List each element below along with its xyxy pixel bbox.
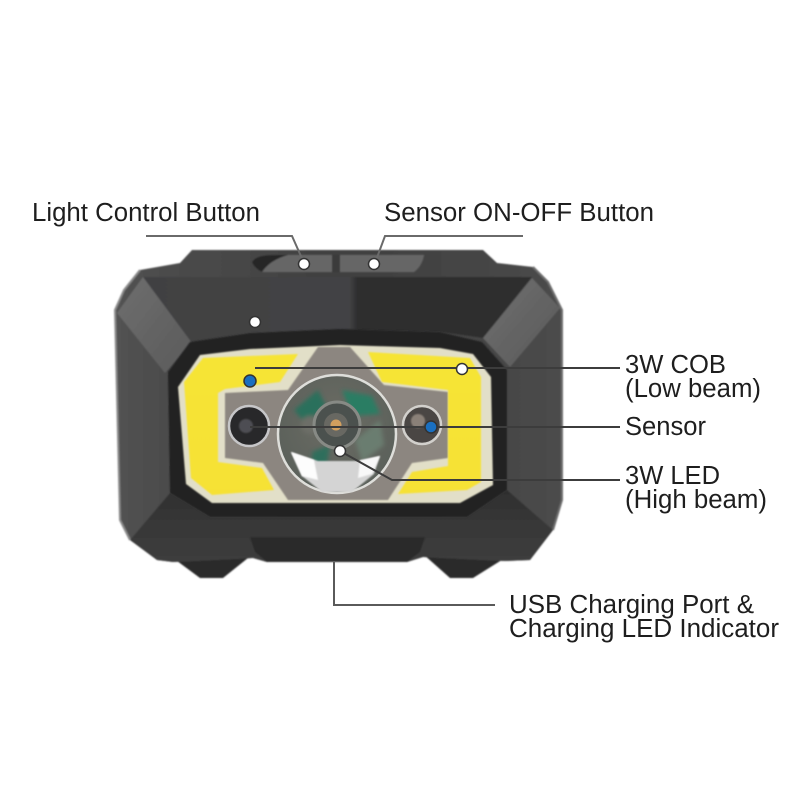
label: 3W LED: (High beam) xyxy=(625,486,767,514)
label: USB charging port: Charging LED Indicator xyxy=(509,615,780,643)
label: USB charging port: USB Charging Port & xyxy=(509,591,754,619)
top strip of buttons xyxy=(252,255,424,272)
label: 3W LED: 3W LED xyxy=(625,462,720,490)
headlamp body xyxy=(115,250,562,578)
left sensor xyxy=(229,406,269,446)
right COB strip xyxy=(368,352,481,494)
right sensor xyxy=(403,406,441,444)
leader lines xyxy=(146,236,620,605)
left facet xyxy=(117,277,192,373)
main LED lens xyxy=(278,375,396,493)
top face xyxy=(143,277,532,373)
right facet xyxy=(483,278,560,367)
LED reflector rings xyxy=(314,402,360,448)
label: 3W LED xyxy=(625,462,767,514)
LED chip xyxy=(330,420,342,430)
lower reflector highlight xyxy=(291,452,380,492)
green circuit board xyxy=(294,390,384,470)
charging port cover xyxy=(250,537,425,562)
label: 3W COB xyxy=(625,351,761,403)
label: sensor on-off button: Sensor ON-OFF Button xyxy=(384,199,654,227)
marker dots xyxy=(244,258,468,456)
left COB strip xyxy=(184,354,298,495)
brown centre plate xyxy=(225,347,448,500)
headlamp illustration xyxy=(115,250,562,578)
lower band xyxy=(130,490,553,562)
label: light control button: Light Control Button xyxy=(32,199,260,227)
label: 3W COB: 3W COB xyxy=(625,351,726,379)
silver face panel xyxy=(178,345,493,503)
label: sensor: Sensor xyxy=(625,413,707,441)
light edge xyxy=(115,270,140,540)
label: USB charging port xyxy=(509,591,780,643)
label: 3W COB: (Low beam) xyxy=(625,375,761,403)
feet xyxy=(173,554,253,578)
dark lens bezel xyxy=(168,329,507,517)
